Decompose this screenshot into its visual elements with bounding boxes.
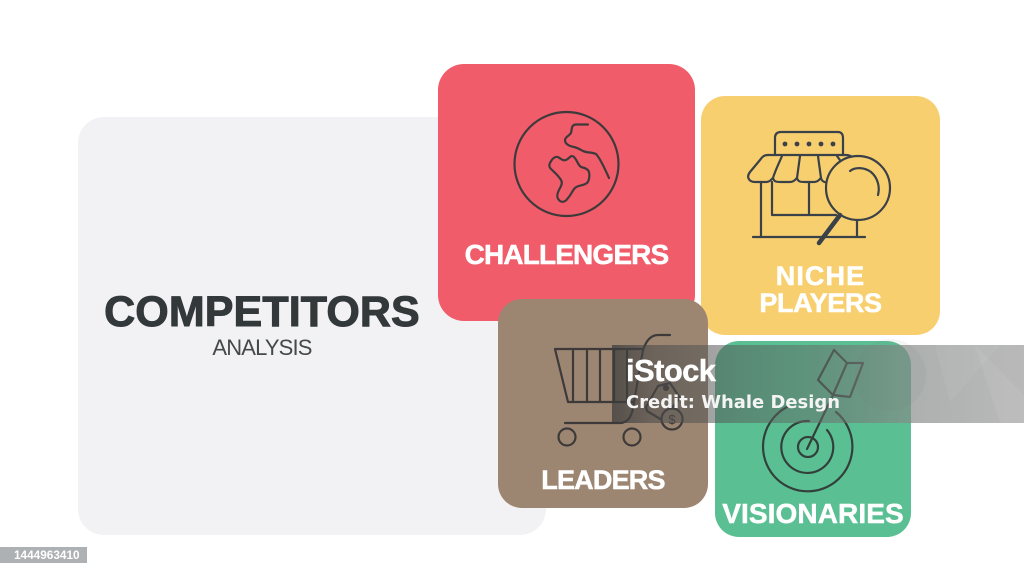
label: challengers: CHALLENGERS [465,239,668,270]
heading: competitors: COMPETITORS [104,288,420,336]
label: niche players [759,261,882,318]
label: leaders: LEADERS [541,465,665,495]
watermark: iStock: iStock [626,353,717,388]
panel: competitors analysis [78,117,546,535]
panel: visionaries [715,341,911,537]
image id tag [0,547,87,563]
watermark: credit: Credit: Whale Design [626,393,840,413]
panel: leaders [498,299,708,508]
subheading: analysis: ANALYSIS [212,335,312,360]
label: visionaries: VISIONARIES [722,498,904,529]
label: niche players: PLAYERS [759,288,882,318]
image id tag: 1444963410 [14,548,80,562]
panel: niche players [701,96,940,335]
watermark swirl shapes [854,339,1024,423]
icon: shopping cart with price tag: $ [668,412,676,427]
label: niche players: NICHE [776,261,865,291]
panel: challengers [438,64,695,321]
